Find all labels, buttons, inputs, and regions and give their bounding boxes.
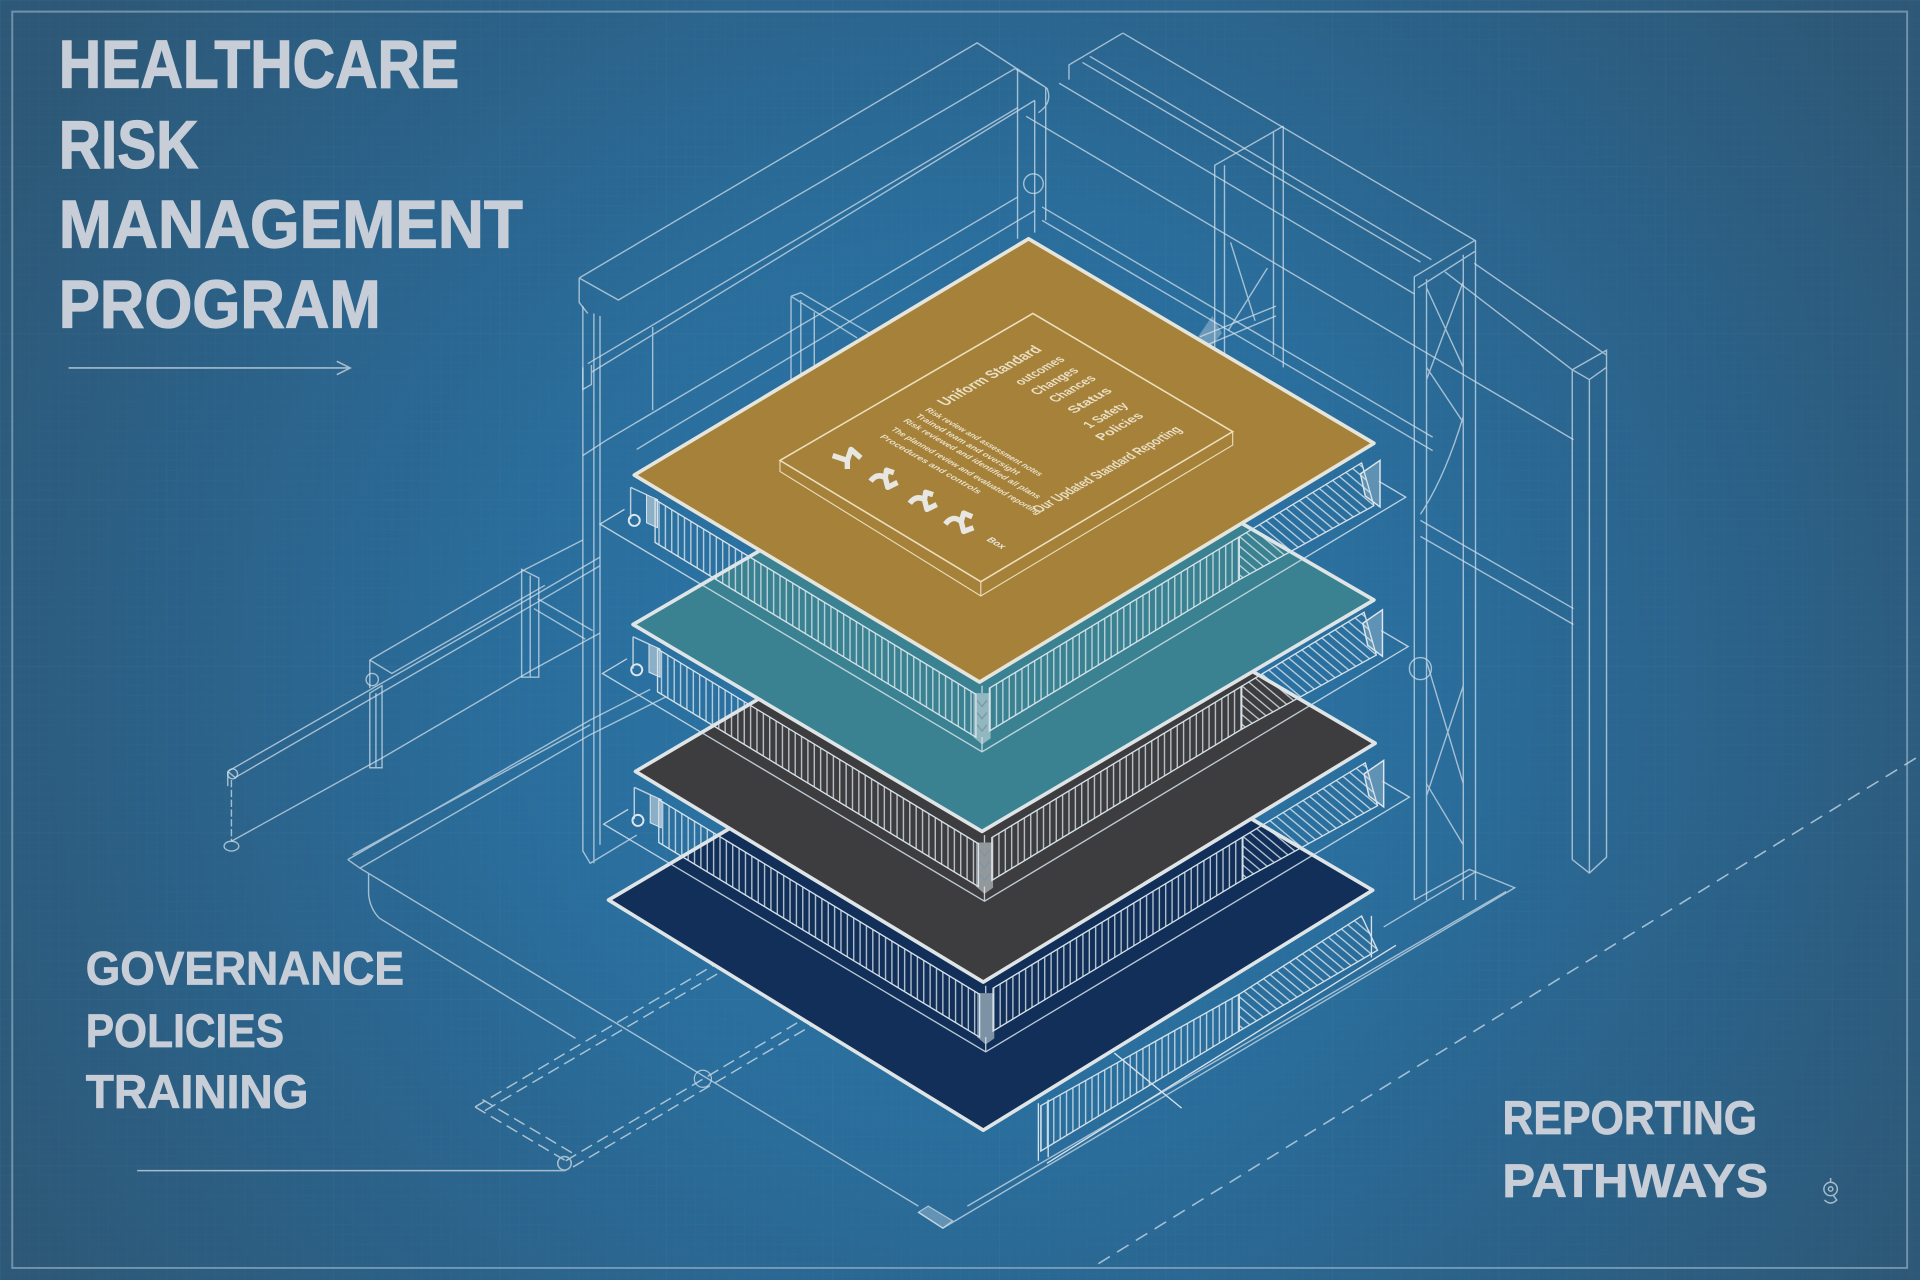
layer 2: teal plate (633, 397, 1374, 831)
document body lines: The planned review and evaluated reporting (888, 426, 1045, 516)
label: reporting pathways: REPORTING (1502, 1091, 1757, 1144)
title: RISK (59, 108, 198, 183)
document body lines: Risk reviewed and identified all plans (901, 417, 1044, 500)
wireframe: dashed reporting route (475, 956, 811, 1167)
labels: governance, policies, training: TRAINING (86, 1065, 309, 1118)
document body lines: Risk review and assessment notes (923, 406, 1046, 477)
document list: Changes (1027, 365, 1082, 397)
labels: governance, policies, training: GOVERNANCE (86, 941, 404, 994)
icon: route joint circle (694, 1070, 711, 1087)
document list: 1 Safety (1079, 400, 1132, 430)
wireframe: left fence rail (224, 540, 600, 851)
layer 4: navy plate (609, 670, 1373, 1130)
wireframe: brace highlight (1194, 316, 1222, 353)
layer 2 underside supports (602, 610, 1408, 901)
document list (1011, 354, 1147, 442)
wireframe: floor slab (348, 689, 918, 1206)
title: MANAGEMENT (59, 188, 523, 263)
document body lines: Trained team and oversight (913, 412, 1024, 476)
document list: Chances (1045, 373, 1099, 404)
layer 3 underside supports (604, 760, 1409, 1052)
arrow under title (69, 361, 350, 375)
layer 1: gold plate with document (634, 239, 1374, 682)
document step icons (833, 449, 973, 531)
label: reporting pathways: PATHWAYS (1502, 1154, 1768, 1207)
document list: outcomes (1011, 354, 1068, 387)
wireframe: back building structure (579, 33, 1607, 1228)
leader line under labels (137, 1157, 571, 1171)
document footer line: Our Updated Standard Reporting (1029, 424, 1186, 515)
label: reporting pathways (1502, 1091, 1768, 1207)
document list: Status (1063, 385, 1116, 415)
layer 1 underside supports (600, 460, 1406, 752)
document outline (780, 313, 1233, 596)
dashed pathway line (1098, 756, 1920, 1264)
wireframe: floor corner block (918, 1206, 953, 1228)
document list: Policies (1092, 410, 1147, 442)
document heading: Uniform Standard (934, 344, 1046, 409)
layer 3: charcoal plate (636, 540, 1375, 982)
document small tag: Box (983, 536, 1009, 551)
title: PROGRAM (59, 268, 381, 343)
title: HEALTHCARE (59, 27, 459, 102)
document body lines: Procedures and controls (877, 433, 985, 495)
labels: governance, policies, training: POLICIES (86, 1004, 284, 1057)
labels: governance, policies, training (86, 941, 404, 1118)
lower base hatch under navy layer (1038, 916, 1396, 1163)
title (59, 27, 523, 343)
icon: small drafting mark (1824, 1178, 1837, 1203)
